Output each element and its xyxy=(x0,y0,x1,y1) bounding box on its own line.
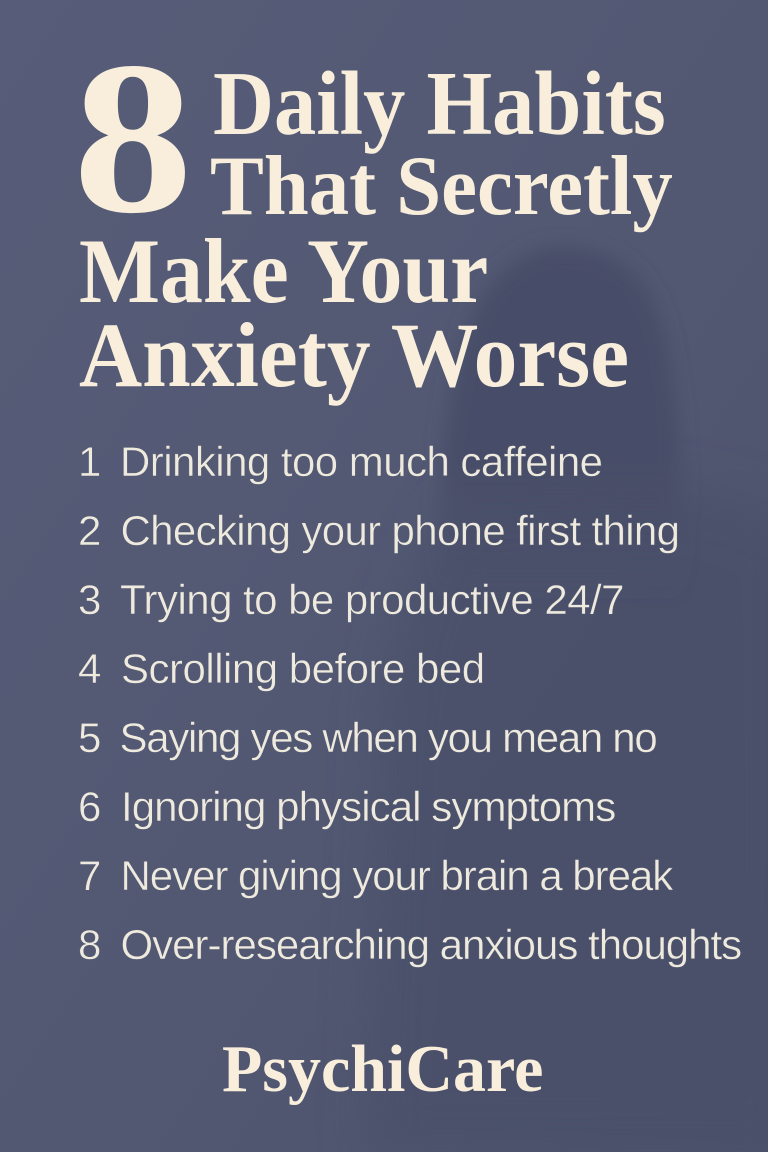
habit list: 6 xyxy=(78,783,99,830)
habit list: 2 xyxy=(78,507,99,554)
title line 3: Make Your xyxy=(79,220,488,322)
title line 4: Anxiety Worse xyxy=(79,304,629,406)
item 7 xyxy=(78,852,674,899)
title line 2: That Secretly xyxy=(210,139,673,233)
habit list: 8 xyxy=(78,921,99,968)
item 5 xyxy=(78,714,656,761)
habit list: 4 xyxy=(78,645,99,692)
habit list: Never giving your brain a break xyxy=(120,852,672,899)
item 3 xyxy=(78,576,624,623)
habit list: Drinking too much caffeine xyxy=(120,438,602,485)
habit list: Over-researching anxious thoughts xyxy=(120,921,741,968)
brand name: PsychiCare xyxy=(222,1032,543,1106)
title line 1: Daily Habits xyxy=(213,53,666,154)
habit list: Ignoring physical symptoms xyxy=(121,783,615,830)
habit list: Trying to be productive 24/7 xyxy=(120,576,624,623)
title xyxy=(73,18,673,406)
item 1 xyxy=(78,438,602,485)
habit list: 5 xyxy=(78,714,99,761)
habit list: 3 xyxy=(78,576,99,623)
habit list: Checking your phone first thing xyxy=(120,507,679,554)
item 2 xyxy=(78,507,679,554)
habit list: 1 xyxy=(78,438,99,485)
habit list: 7 xyxy=(78,852,99,899)
habit list: Saying yes when you mean no xyxy=(120,714,656,761)
item 8 xyxy=(78,921,741,968)
item 4 xyxy=(78,645,485,692)
big numeral 8: 8 xyxy=(73,18,193,259)
item 6 xyxy=(78,783,615,830)
habit list: Scrolling before bed xyxy=(121,645,485,692)
habit list xyxy=(78,438,741,968)
